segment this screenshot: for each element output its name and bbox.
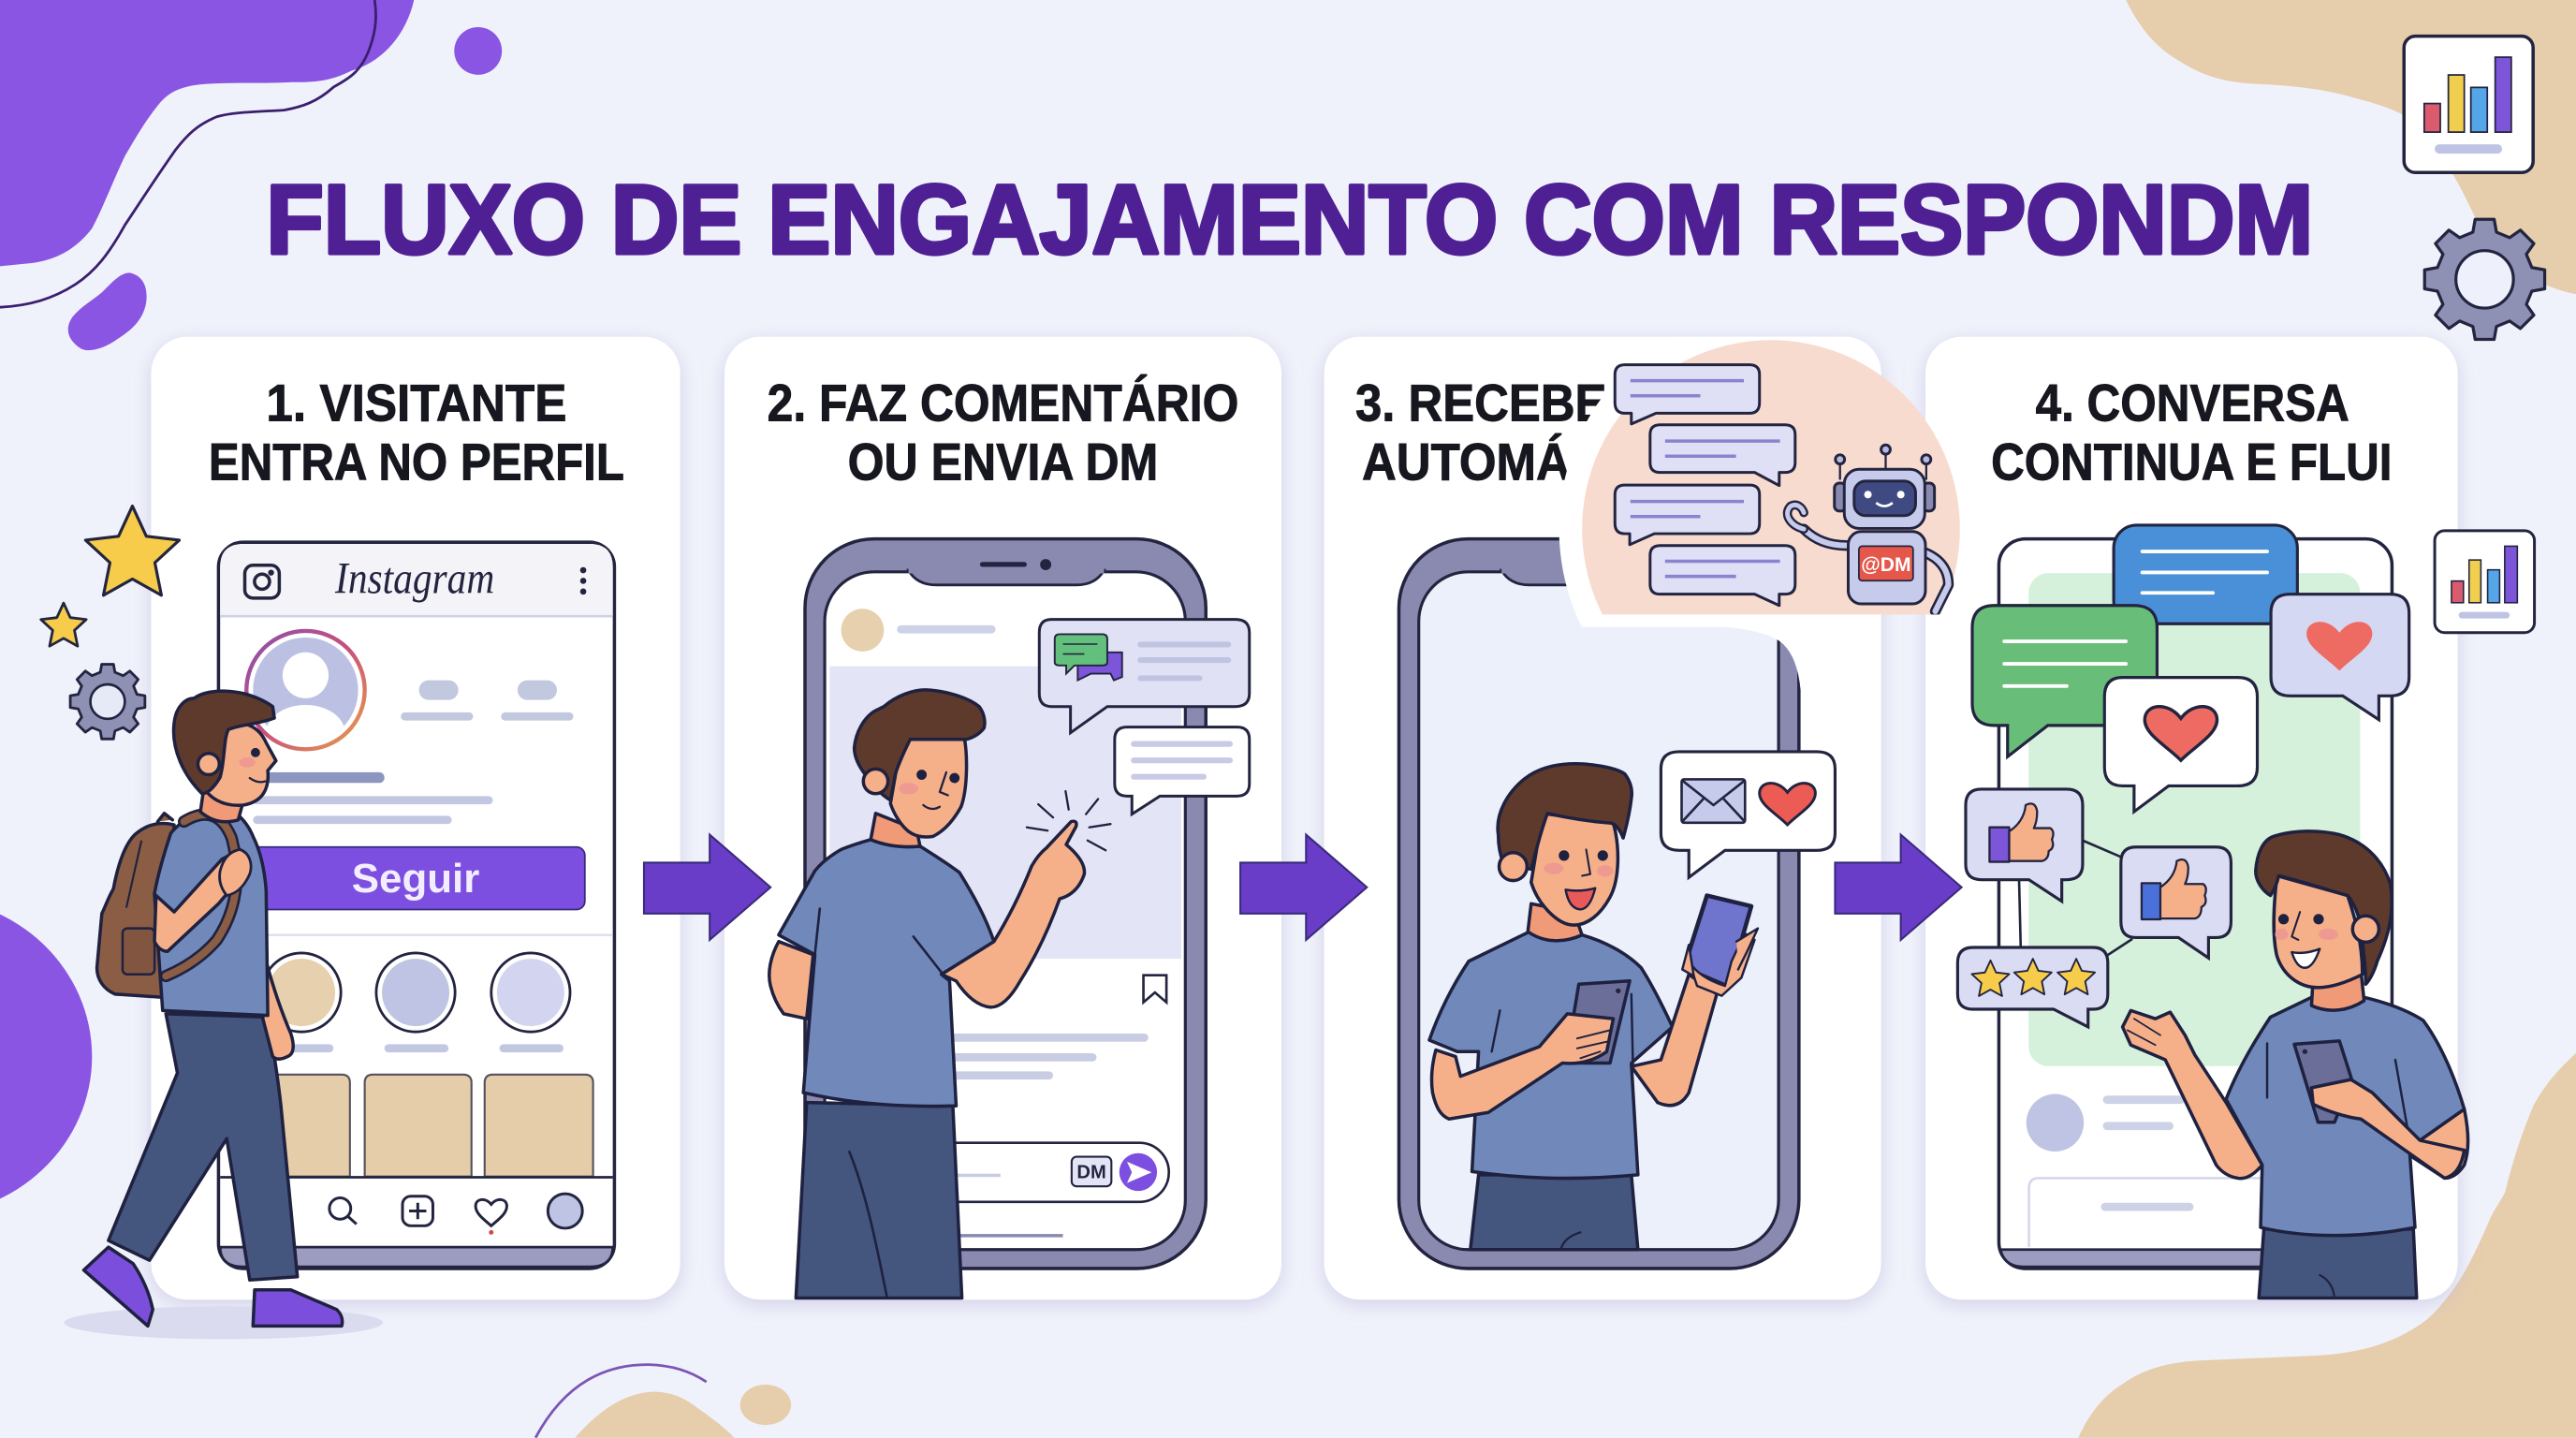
- white patch corner over phone: [1708, 624, 1808, 690]
- green chat bubble: [1972, 606, 2157, 756]
- robot arms: [1804, 529, 1847, 546]
- icon: thumb up: [1989, 803, 2054, 862]
- antennas: [1840, 453, 1926, 479]
- hair: [174, 691, 274, 794]
- icon: bookmark: [1144, 976, 1166, 1003]
- curve: top-left outline: [0, 0, 376, 307]
- hair: [855, 690, 985, 800]
- chart card: small: [2435, 531, 2535, 633]
- phone raised: [1684, 896, 1751, 987]
- green chat panel: [2028, 573, 2360, 1066]
- shirt: [154, 812, 268, 1016]
- reply input box: [2029, 1178, 2300, 1247]
- automated reply bubbles: [1615, 365, 1795, 606]
- follow button: [243, 847, 585, 909]
- person: step 1 walking visitor: [84, 691, 343, 1326]
- icon: left gear: [70, 665, 145, 739]
- face: [2274, 875, 2363, 988]
- back shoe: [84, 1247, 153, 1326]
- person: step 2 pointing back view: [769, 690, 1085, 1299]
- send button: [1120, 1153, 1157, 1191]
- heading: step 2: 2. FAZ COMENTÁRIO: [768, 374, 1238, 432]
- blob: small purple dot: [454, 27, 502, 75]
- reply bubble: [1115, 727, 1250, 814]
- blob: bottom-center beige: [575, 1392, 735, 1438]
- pants: [2259, 1229, 2417, 1299]
- face: [890, 738, 967, 837]
- hair: [2256, 831, 2392, 984]
- right arm raised: [1632, 975, 1717, 1106]
- shirt: [2226, 997, 2465, 1236]
- backpack strap: [166, 814, 237, 976]
- star rating bubble: [1957, 947, 2108, 1027]
- icon: heart: [2306, 622, 2372, 670]
- chest phone: [1566, 981, 1630, 1064]
- phone: step 4 conversation: [1998, 539, 2392, 1269]
- comment bubble: [1039, 620, 1250, 733]
- blue chat bubble: [2114, 525, 2297, 624]
- instagram wordmark: Instagram: [334, 555, 494, 604]
- blob: small purple drop: [68, 272, 147, 350]
- DM badge: [1072, 1157, 1111, 1186]
- blob: bottom-right beige: [2078, 1053, 2576, 1438]
- blob: left purple half circle: [0, 897, 92, 1216]
- thumbs-up bubble: blue: [2121, 847, 2231, 958]
- heading: step 3: [1355, 374, 1606, 491]
- robot torso: [1848, 532, 1925, 604]
- forearm and hand on phone: [2311, 1079, 2465, 1178]
- peach circle: [1582, 340, 1960, 614]
- blob: bottom-center beige dot: [740, 1385, 791, 1425]
- heading: step 4: 4. CONVERSA: [2036, 374, 2349, 432]
- left arm: [1431, 1014, 1614, 1119]
- icon: small star: [41, 603, 86, 646]
- icon: heart: [1760, 784, 1815, 825]
- bottom navigation icons: [329, 1194, 582, 1228]
- robot head: [1844, 469, 1925, 528]
- post author: [842, 609, 996, 652]
- gesturing arm: [2123, 1010, 2262, 1179]
- shirt: [1429, 932, 1673, 1178]
- front shoe: [253, 1290, 343, 1326]
- hanging arm: [263, 961, 293, 1059]
- heading: step 1: [209, 374, 624, 491]
- story highlights: [262, 953, 570, 1032]
- heading: step 3: 3. RECEBE: [1355, 374, 1606, 432]
- icon: chat glyphs: [1055, 634, 1122, 681]
- DM badge: DM: [1076, 1162, 1106, 1182]
- phone: step 3: [1398, 539, 1799, 1269]
- icon: heart: [2144, 707, 2217, 760]
- icon: instagram camera: [245, 565, 279, 598]
- heading: step 3: AUTOMÁ: [1362, 433, 1571, 491]
- panel: step 2 card: [724, 337, 1281, 1299]
- icon: thumb up: [2142, 859, 2206, 919]
- backpack: [97, 814, 174, 997]
- face: [200, 723, 276, 805]
- heart bubble: top right: [2271, 594, 2409, 720]
- right arm sleeve area: [2402, 1109, 2468, 1178]
- blob: top-right beige: [2126, 0, 2576, 294]
- pants: [796, 1103, 962, 1299]
- pants: [1471, 1175, 1638, 1250]
- profile stats: [401, 681, 574, 721]
- heading: step 4: [1991, 374, 2392, 491]
- photo grid: [246, 1075, 593, 1177]
- arm holding strap: [154, 849, 246, 951]
- heading: step 2: [768, 374, 1238, 491]
- robot: @DM: [1861, 554, 1910, 576]
- robot ears: [1835, 483, 1846, 511]
- blob: top-left purple: [0, 0, 414, 266]
- person: step 3 happy with phones: [1429, 764, 1758, 1250]
- bubble 1: [1615, 365, 1760, 424]
- phone chin: [220, 1247, 613, 1267]
- chart card: top right: [2404, 37, 2533, 172]
- robot DM badge: [1859, 546, 1913, 580]
- heading: step 1: 1. VISITANTE: [266, 374, 567, 432]
- avatar: [246, 631, 365, 761]
- heading: step 2: OU ENVIA DM: [848, 433, 1158, 491]
- person: step 4 gesturing: [2123, 831, 2468, 1299]
- robot claw: [1788, 505, 1804, 529]
- arrow: step 1 to 2: [644, 835, 770, 940]
- white cutout patch over step 3: [1559, 345, 1881, 627]
- bio lines: [253, 772, 493, 824]
- follow button: Seguir: [352, 856, 479, 902]
- post image: [829, 667, 1181, 959]
- message input: [887, 1143, 1169, 1202]
- shirt: [779, 840, 994, 1107]
- pointing arm: [942, 821, 1085, 1007]
- left arm: [769, 942, 813, 1019]
- app header: [220, 544, 613, 616]
- shadow under person: [64, 1306, 383, 1339]
- caption lines: [944, 1034, 1149, 1079]
- robot: [1788, 445, 1949, 611]
- neck: [200, 788, 243, 822]
- bubble 3: [1615, 485, 1760, 545]
- heading: step 1: ENTRA NO PERFIL: [209, 433, 624, 491]
- heading: step 4: CONTINUA E FLUI: [1991, 433, 2392, 491]
- panel: step 3 card: [1325, 337, 1881, 1299]
- arrow: step 3 to 4: [1835, 835, 1962, 940]
- curve: bottom-center purple arc: [535, 1365, 707, 1438]
- contact row: [2027, 1094, 2185, 1152]
- icon: top-right gear: [2424, 219, 2545, 340]
- arrow: step 2 to 3: [1240, 835, 1367, 940]
- heart bubble: white: [2104, 678, 2258, 812]
- panel: step 1 card: [151, 337, 681, 1299]
- phone: step 1 instagram profile: [218, 542, 614, 1269]
- tap sparkle lines: [1027, 791, 1110, 850]
- icon: three stars: [1971, 959, 2095, 996]
- walking legs: [109, 1014, 298, 1280]
- icon: big star: [85, 506, 180, 595]
- highlight labels: [268, 1044, 564, 1052]
- envelope heart bubble: [1661, 752, 1835, 877]
- panel: step 4 card: [1925, 337, 2458, 1299]
- neck: [871, 814, 920, 847]
- neck: [1528, 903, 1582, 941]
- hand on strap: [220, 849, 251, 896]
- bubble 4: [1650, 546, 1795, 606]
- face: [1531, 814, 1617, 925]
- phone: step 2 post view: [805, 539, 1206, 1269]
- connectors between reaction bubbles: [2019, 841, 2132, 955]
- chest phone: [2294, 1041, 2351, 1123]
- neck: [2311, 970, 2364, 1010]
- title: FLUXO DE ENGAJAMENTO COM RESPONDM: [266, 165, 2313, 274]
- phone chin: [2000, 1250, 2300, 1267]
- icon: envelope: [1682, 779, 1745, 823]
- hair: [1498, 764, 1632, 869]
- icon: menu dots: [580, 567, 586, 594]
- thumbs-up bubble: purple: [1966, 789, 2083, 902]
- notch: [909, 570, 1104, 585]
- bubble 2: [1650, 425, 1795, 486]
